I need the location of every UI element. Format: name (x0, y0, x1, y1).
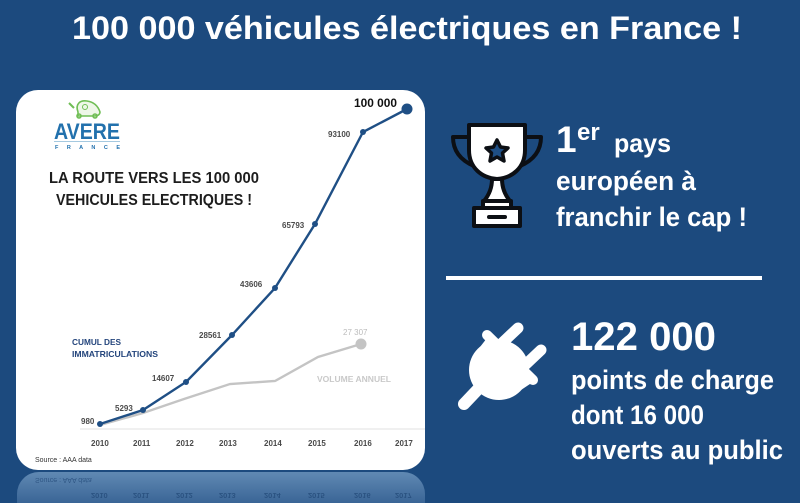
x axis years: 2013 (219, 439, 237, 448)
line: annual volume (100, 338, 366, 425)
panel: card reflection: 2016 (354, 491, 371, 500)
text: 122 000 points de charge: dont 16 000 (571, 400, 704, 430)
label: cumul des immatriculations: IMMATRICULATIONS (72, 349, 158, 359)
x axis years: 2015 (308, 439, 326, 448)
panel: card reflection: 2011 (133, 491, 149, 500)
data labels: 28561 (199, 331, 222, 340)
chart heading: LA ROUTE VERS LES 100 000 (49, 170, 259, 187)
data labels: 5293 (115, 404, 133, 413)
icon: trophy (453, 125, 541, 226)
x axis years: 2012 (176, 439, 194, 448)
panel: line chart card (16, 90, 425, 470)
icon: electric plug (464, 328, 541, 404)
text: 1er pays européen: européen à (556, 166, 697, 196)
panel: card reflection: 2013 (219, 491, 236, 500)
panel: card reflection: 2017 (395, 491, 412, 500)
panel: card reflection (17, 472, 425, 503)
divider (446, 276, 762, 280)
panel: card reflection: 2014 (264, 491, 282, 500)
data labels: 93100 (328, 130, 351, 139)
text: 1er pays européen: franchir le cap ! (556, 202, 747, 232)
text: 122 000 points de charge: 122 000 (571, 315, 716, 359)
label: 100 000: 100 000 (354, 98, 397, 110)
x axis years: 2010 (91, 439, 109, 448)
panel: card reflection: 2010 (91, 491, 108, 500)
line: cumulative registrations (97, 104, 412, 427)
x axis years: 2011 (133, 439, 151, 448)
label: volume annuel: VOLUME ANNUEL (317, 374, 391, 384)
data labels: 980 (81, 417, 95, 426)
data labels: 43606 (240, 280, 263, 289)
logo wordmark: AVERE (54, 119, 120, 144)
x axis years: 2017 (395, 439, 413, 448)
text: 1er pays européen: pays (614, 128, 671, 158)
chart heading: VEHICULES ELECTRIQUES ! (56, 192, 252, 209)
text: 122 000 points de charge (571, 315, 783, 465)
panel: card reflection: 2015 (308, 491, 325, 500)
data labels: 14607 (152, 374, 175, 383)
value: 27 307: 27 307 (343, 328, 368, 337)
data labels: 65793 (282, 221, 305, 230)
text: 1er pays européen: 1 (556, 119, 577, 160)
x axis years: 2016 (354, 439, 372, 448)
text: 1er pays européen: er (577, 119, 600, 146)
x axis years (91, 439, 413, 448)
chart heading (49, 170, 259, 209)
label: cumul des immatriculations (72, 337, 158, 359)
logo: AVERE France (54, 101, 120, 151)
data labels (81, 130, 351, 426)
x axis years: 2014 (264, 439, 282, 448)
text: 122 000 points de charge: points de charge (571, 365, 774, 395)
text: 122 000 points de charge: ouverts au public (571, 435, 783, 465)
text: 1er pays européen (556, 119, 747, 232)
source: Source : AAA data (35, 457, 92, 464)
panel: card reflection: 2012 (176, 491, 193, 500)
logo subtitle: F R A N C E (55, 145, 120, 151)
panel: card reflection: Source : AAA data (35, 476, 92, 483)
x axis baseline (80, 428, 425, 430)
label: cumul des immatriculations: CUMUL DES (72, 337, 121, 347)
title: 100 000 véhicules électriques en France ! (72, 10, 742, 46)
icon: green electric car (69, 101, 100, 118)
